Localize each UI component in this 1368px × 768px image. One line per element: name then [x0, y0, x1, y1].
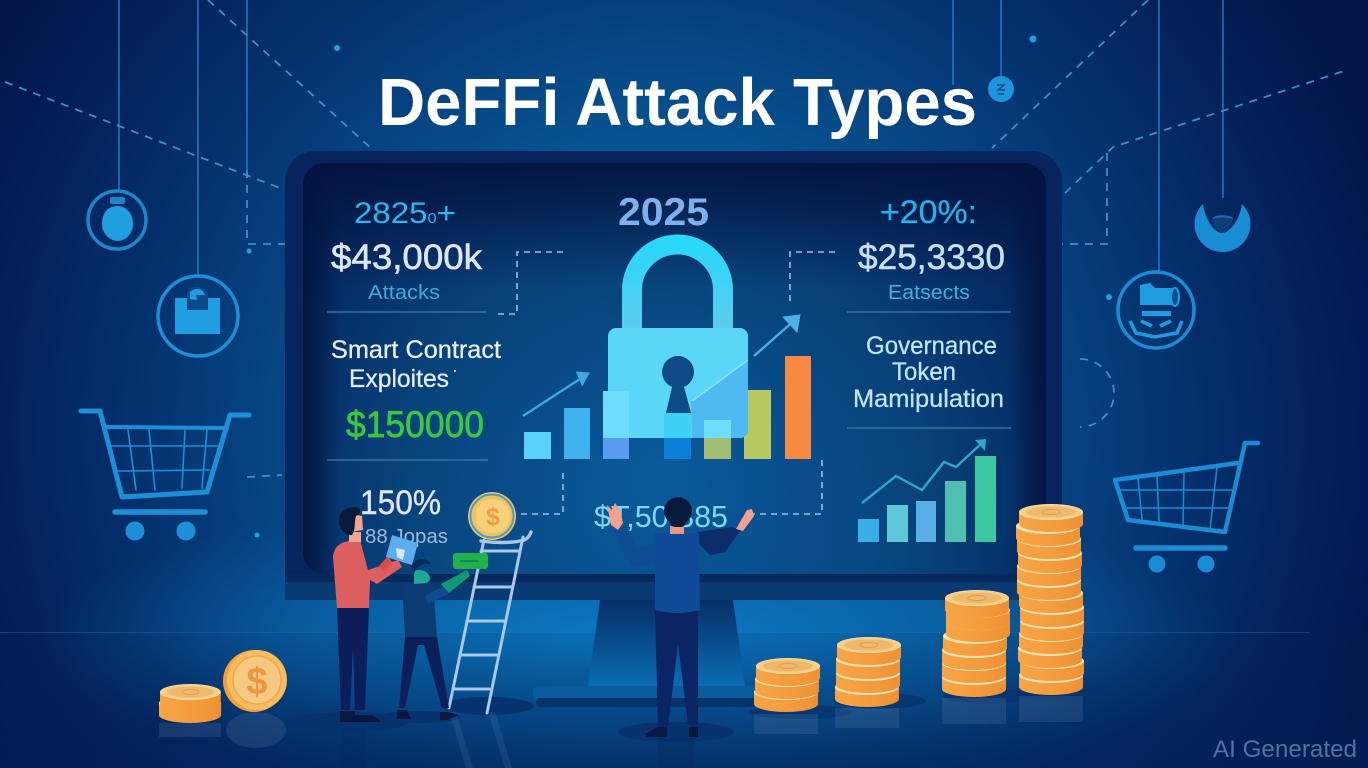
- shoes: [645, 727, 698, 737]
- monitor: [285, 151, 1062, 600]
- icon: tablet: [386, 535, 418, 565]
- heading: smart contract: Smart Contract: [331, 336, 501, 364]
- person: raised arms: [607, 497, 754, 737]
- coin stack 3: [942, 590, 1010, 697]
- teal face: [414, 570, 430, 584]
- stat: percentage: 150%: [360, 484, 441, 522]
- hair: [411, 559, 431, 574]
- bottom value: $T,50 385: [594, 499, 728, 534]
- left arm: [612, 523, 657, 567]
- right arm: [697, 527, 741, 555]
- connector lines: [493, 252, 835, 514]
- ladder: [449, 532, 531, 713]
- watermark: AI Generated: [1213, 736, 1357, 763]
- shirt: [333, 540, 402, 608]
- stat: green value: $150000: [346, 404, 484, 445]
- icon: crescent: [1194, 204, 1251, 252]
- monitor stand: [533, 600, 776, 707]
- person: small figure: [397, 553, 488, 720]
- icon: padlock: [603, 245, 748, 438]
- legs: [399, 637, 449, 708]
- shoes: [340, 711, 380, 722]
- stat: attacks year: 2825 0+: [354, 197, 456, 230]
- arrow: left trend: [523, 372, 589, 416]
- pants: [337, 608, 369, 710]
- icon: bulb circle: [88, 191, 146, 249]
- floor: [0, 490, 1368, 768]
- decorative dots: [246, 36, 1112, 538]
- label: eatsects: Eatsects: [888, 282, 970, 304]
- hand: [379, 556, 392, 572]
- label: attacks: Attacks: [368, 282, 440, 304]
- background circuit lines: [5, 0, 1347, 477]
- icon: folder circle: [1118, 272, 1194, 348]
- icon: coin badge: [988, 76, 1014, 102]
- reflections: [159, 696, 1083, 768]
- heading: exploites: Exploites: [349, 365, 449, 393]
- shoes: [397, 710, 459, 720]
- coin stack 2: [835, 637, 901, 707]
- icon: left shopping cart: [81, 411, 249, 540]
- hair: [339, 507, 360, 535]
- green sleeve: [441, 570, 470, 593]
- hair: [664, 497, 692, 525]
- center bar chart: [524, 356, 811, 459]
- pants: [655, 610, 698, 727]
- label: jopas: 88 Jopas: [365, 526, 448, 548]
- coin stack 1: [754, 658, 820, 712]
- stat: growth: +20%:: [880, 194, 977, 230]
- right dividers: [847, 312, 1011, 428]
- neck and face: [349, 514, 363, 542]
- left dividers: [327, 312, 488, 460]
- sleeve: [425, 585, 448, 604]
- title: DeFFi Attack Types: [378, 65, 977, 140]
- year label: 2025: [618, 191, 709, 234]
- hoodie: [402, 583, 437, 637]
- floor shadows: [292, 683, 1106, 742]
- panel: right stats: [853, 194, 1005, 413]
- icon: right shopping cart: [1115, 443, 1258, 572]
- torso: [655, 533, 700, 613]
- heading: mamipulation: Mamipulation: [853, 385, 1004, 413]
- stat: attacks value: $43,000k: [331, 238, 483, 277]
- hands: [607, 503, 623, 530]
- mini bar chart: [858, 439, 996, 542]
- icon: ladder coin: $: [486, 503, 500, 531]
- panel: left stats: [331, 197, 501, 548]
- icon: upright dollar coin: [223, 650, 287, 712]
- heading: governance: Governance: [866, 332, 997, 360]
- icon: upright dollar coin: $: [246, 661, 268, 703]
- person: red shirt: [333, 507, 402, 722]
- icon: ladder coin: [468, 492, 516, 540]
- coin stack: floor left: [159, 684, 221, 723]
- stat: right value: $25,3330: [858, 238, 1005, 277]
- coin stack 4: [1016, 504, 1084, 695]
- neck: [670, 526, 684, 534]
- heading: token: Token: [892, 358, 956, 386]
- money: [453, 553, 488, 569]
- icon: box circle: [158, 276, 238, 356]
- arrow: right trend: [754, 315, 800, 356]
